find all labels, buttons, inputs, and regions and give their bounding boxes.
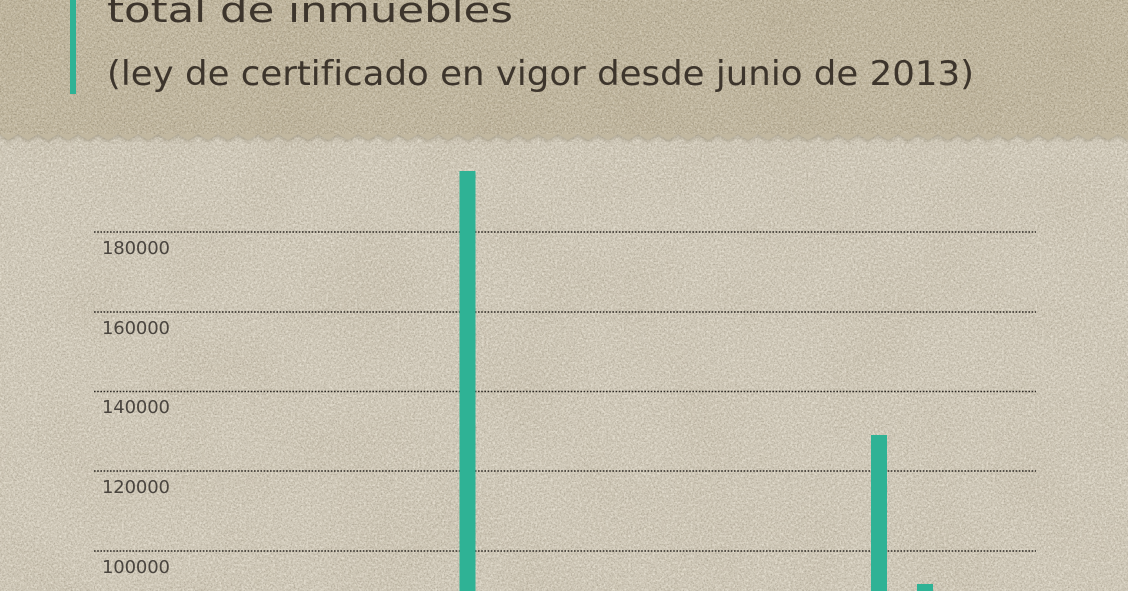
accent bar beside heading xyxy=(70,0,76,94)
y-axis labels: 120000 xyxy=(102,477,170,498)
y-axis labels xyxy=(102,238,170,578)
y-axis labels: 180000 xyxy=(102,238,170,259)
subheading: (ley de certificado en vigor desde junio de 2013) xyxy=(107,54,974,94)
bar chart xyxy=(94,171,1036,591)
bars xyxy=(460,171,933,591)
y-axis gridlines xyxy=(94,232,1036,551)
y-axis labels: 100000 xyxy=(102,557,170,578)
panel: header band with serrated edge xyxy=(0,0,1128,142)
y-axis labels: 140000 xyxy=(102,397,170,418)
y-axis labels: 160000 xyxy=(102,318,170,339)
